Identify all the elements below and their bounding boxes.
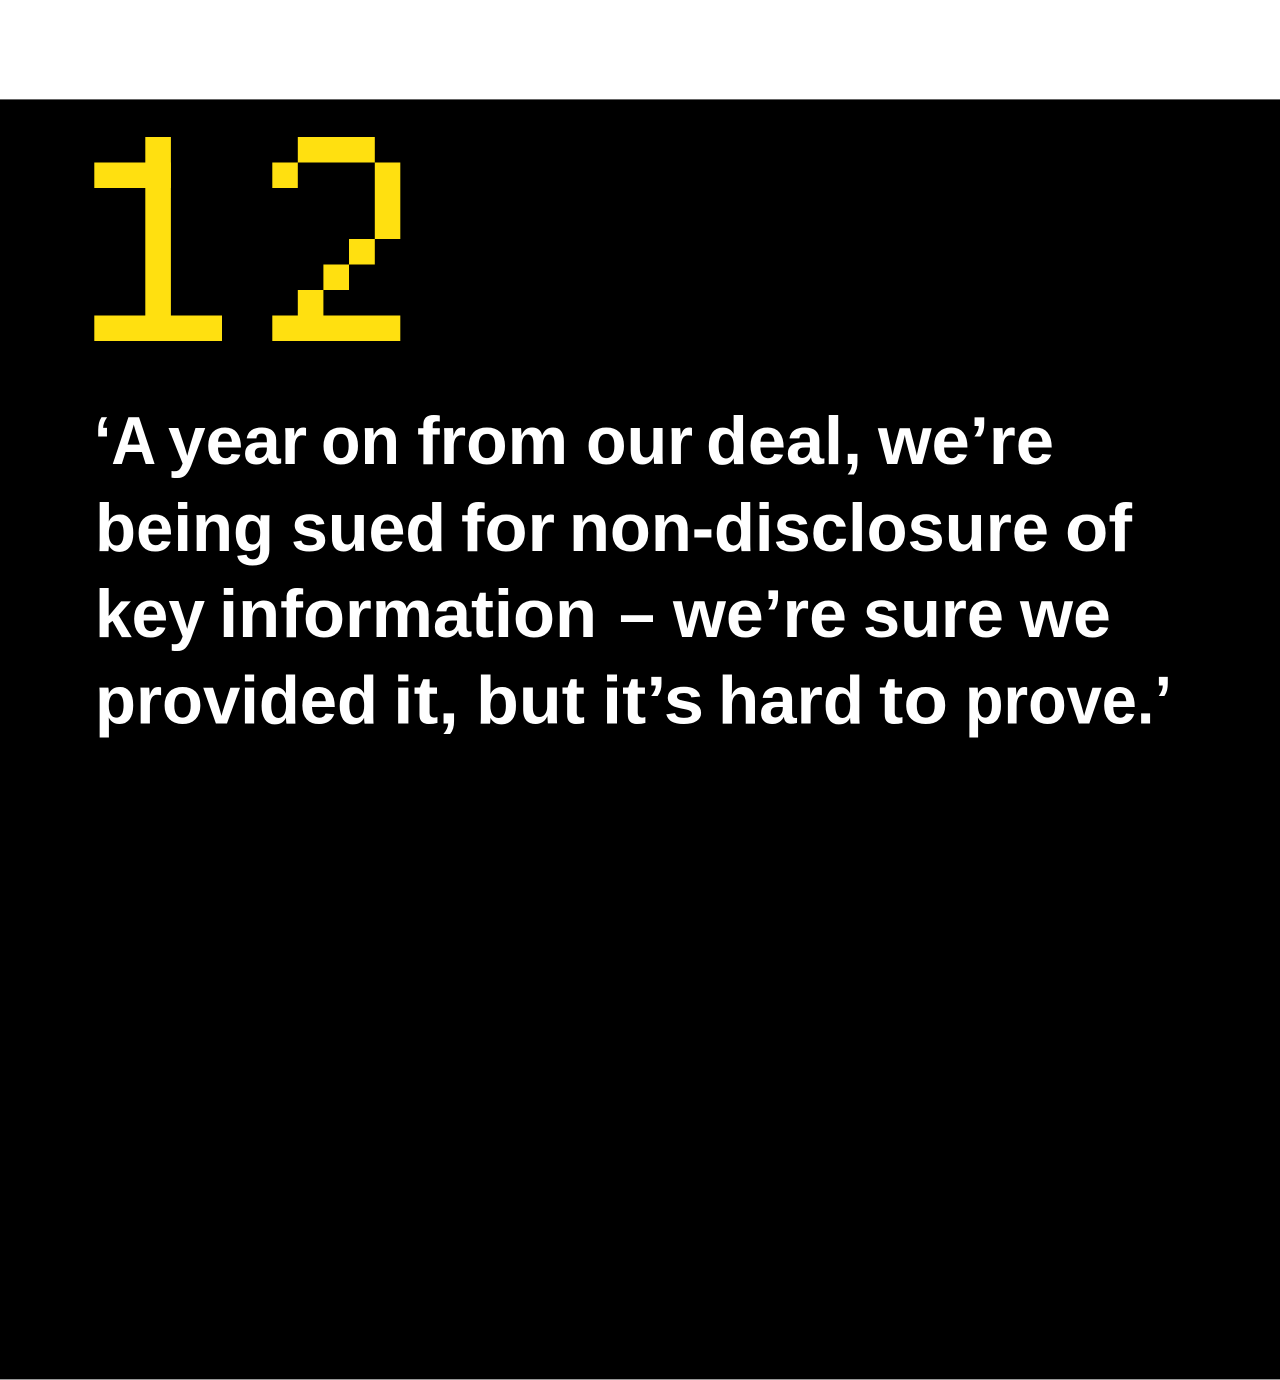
- quote text: provided: [95, 662, 378, 738]
- quote text: prove.’: [965, 662, 1172, 738]
- quote text: of: [1065, 490, 1132, 566]
- quote text: from: [417, 403, 568, 479]
- quote text: but: [476, 662, 585, 738]
- quote text: our: [586, 403, 693, 479]
- quote text: we’re: [877, 403, 1054, 479]
- quote text: it’s: [602, 662, 704, 738]
- quote text: ‘A: [94, 403, 155, 479]
- quote text: to: [879, 662, 948, 738]
- quote text: non-disclosure: [569, 490, 1049, 566]
- numeral: 12: [94, 137, 400, 402]
- quote text: we: [1019, 576, 1111, 652]
- quote text: sure: [863, 576, 1004, 652]
- quote text: hard: [718, 662, 864, 738]
- quote text: we’re: [672, 576, 847, 652]
- quote text: year: [168, 403, 307, 479]
- quote text: –: [619, 576, 655, 652]
- quote text: deal,: [706, 403, 862, 479]
- quote text: on: [321, 403, 400, 479]
- quote text: [94, 403, 1172, 738]
- quote text: being: [95, 490, 274, 566]
- quote text: for: [461, 490, 555, 566]
- quote text: sued: [291, 490, 446, 566]
- quote text: it,: [393, 662, 459, 738]
- quote text: information: [219, 576, 597, 652]
- quote text: key: [95, 576, 205, 652]
